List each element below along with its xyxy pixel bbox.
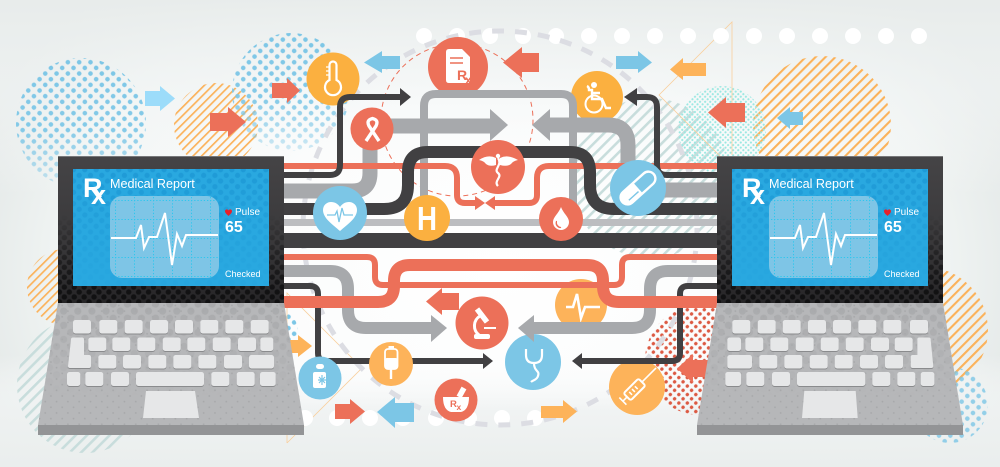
arrow: red right bottom xyxy=(335,399,365,424)
checked label right: Checked xyxy=(884,269,920,279)
icon: mortar and pestle: x xyxy=(456,402,462,412)
checked label: Checked xyxy=(225,269,261,279)
keyboard right xyxy=(725,320,934,386)
ECG chart right xyxy=(769,196,878,278)
laptop base left xyxy=(38,303,304,435)
arrow: red left over dots xyxy=(677,354,708,383)
thick dark arch pipe xyxy=(284,152,717,209)
Rx logo: R xyxy=(83,173,102,203)
thick red arch pipe xyxy=(284,265,717,302)
arrow: red left right side xyxy=(708,97,745,128)
arrow: pale blue right xyxy=(145,86,175,111)
ECG chart xyxy=(110,196,219,278)
bezel and screen right xyxy=(717,156,943,303)
trackpad right xyxy=(802,391,858,418)
icon: mortar and pestle xyxy=(434,378,478,422)
icon: IV bag xyxy=(369,342,413,386)
Rx logo right xyxy=(742,173,765,210)
icon: syringe xyxy=(609,359,665,415)
grey pipe and arrow to centre xyxy=(284,109,508,191)
icon: hospital H xyxy=(404,195,450,241)
dark lower pipe with arrow right xyxy=(572,286,717,369)
thick dark band xyxy=(284,233,717,248)
arrow: blue left top xyxy=(364,51,400,73)
icon: microscope xyxy=(456,296,508,350)
pulse label: Pulse xyxy=(235,207,260,218)
bezel left xyxy=(58,156,284,303)
dark pipe up-left with arrow xyxy=(284,88,411,175)
laptop: right xyxy=(697,156,963,435)
icon: wheelchair xyxy=(571,71,623,123)
icon: blood drop xyxy=(539,197,583,241)
pulse value: 65 xyxy=(225,219,243,236)
arrow: red left top xyxy=(503,47,539,78)
icon: caduceus xyxy=(471,140,525,194)
Rx logo xyxy=(83,173,106,210)
thin grey line xyxy=(284,219,717,226)
arrow: blue right top xyxy=(616,51,652,73)
icon: thermometer xyxy=(306,52,360,106)
keyboard left xyxy=(67,320,276,386)
Rx logo: x xyxy=(91,180,106,210)
lower grey pipe and arrow right xyxy=(518,271,717,342)
icon: ribbon xyxy=(350,108,394,150)
icon: pulse line xyxy=(555,279,607,331)
laptop base right xyxy=(697,303,963,435)
arrow: blue left right side xyxy=(777,107,803,129)
red pipe left with arrow xyxy=(284,166,485,210)
laptop: left xyxy=(38,156,304,435)
arrow: orange right bottom xyxy=(541,400,577,423)
thin triangle outlines xyxy=(287,22,732,443)
Rx logo right: R xyxy=(742,173,762,203)
heart marker xyxy=(225,209,232,216)
icon: prescription document xyxy=(428,37,488,97)
grey pipe and arrow from right xyxy=(532,109,717,190)
icon: mortar and pestle: R xyxy=(450,399,457,410)
icon: heart xyxy=(313,186,367,240)
pulse label right: Pulse xyxy=(894,207,919,218)
arrow: red right upper xyxy=(272,78,300,103)
icon: medicine vial xyxy=(298,356,342,400)
heart marker right xyxy=(884,209,891,216)
thin red lower pipe xyxy=(284,257,717,285)
arrow: red left centre xyxy=(426,288,459,315)
icon: prescription document: x xyxy=(465,73,472,87)
arrow: orange right lower left xyxy=(285,335,312,357)
screen title right: Medical Report xyxy=(769,177,854,191)
Rx logo right: x xyxy=(750,180,765,210)
arrow: orange left top xyxy=(670,58,706,80)
trackpad left xyxy=(143,391,199,418)
arrow: red right xyxy=(210,107,246,137)
lower grey pipe and arrow left xyxy=(284,271,447,342)
icon: prescription document: R xyxy=(457,67,467,83)
dark lower pipe with arrow left xyxy=(284,286,493,369)
screen left xyxy=(73,169,269,286)
icon: capsule xyxy=(610,160,666,216)
arrow: blue left bottom xyxy=(377,397,414,428)
dashed circles xyxy=(303,31,697,425)
white dot rows xyxy=(297,28,927,426)
icon: hospital H: H xyxy=(417,200,437,237)
dark pipe up-right with arrow xyxy=(624,88,717,175)
grey arch pipe xyxy=(424,94,573,205)
red pipe right with arrow xyxy=(485,166,717,210)
pulse value right: 65 xyxy=(884,219,902,236)
icon: stethoscope xyxy=(505,334,561,390)
screen title: Medical Report xyxy=(110,177,195,191)
arrows xyxy=(145,47,803,428)
pipes network xyxy=(284,88,717,369)
